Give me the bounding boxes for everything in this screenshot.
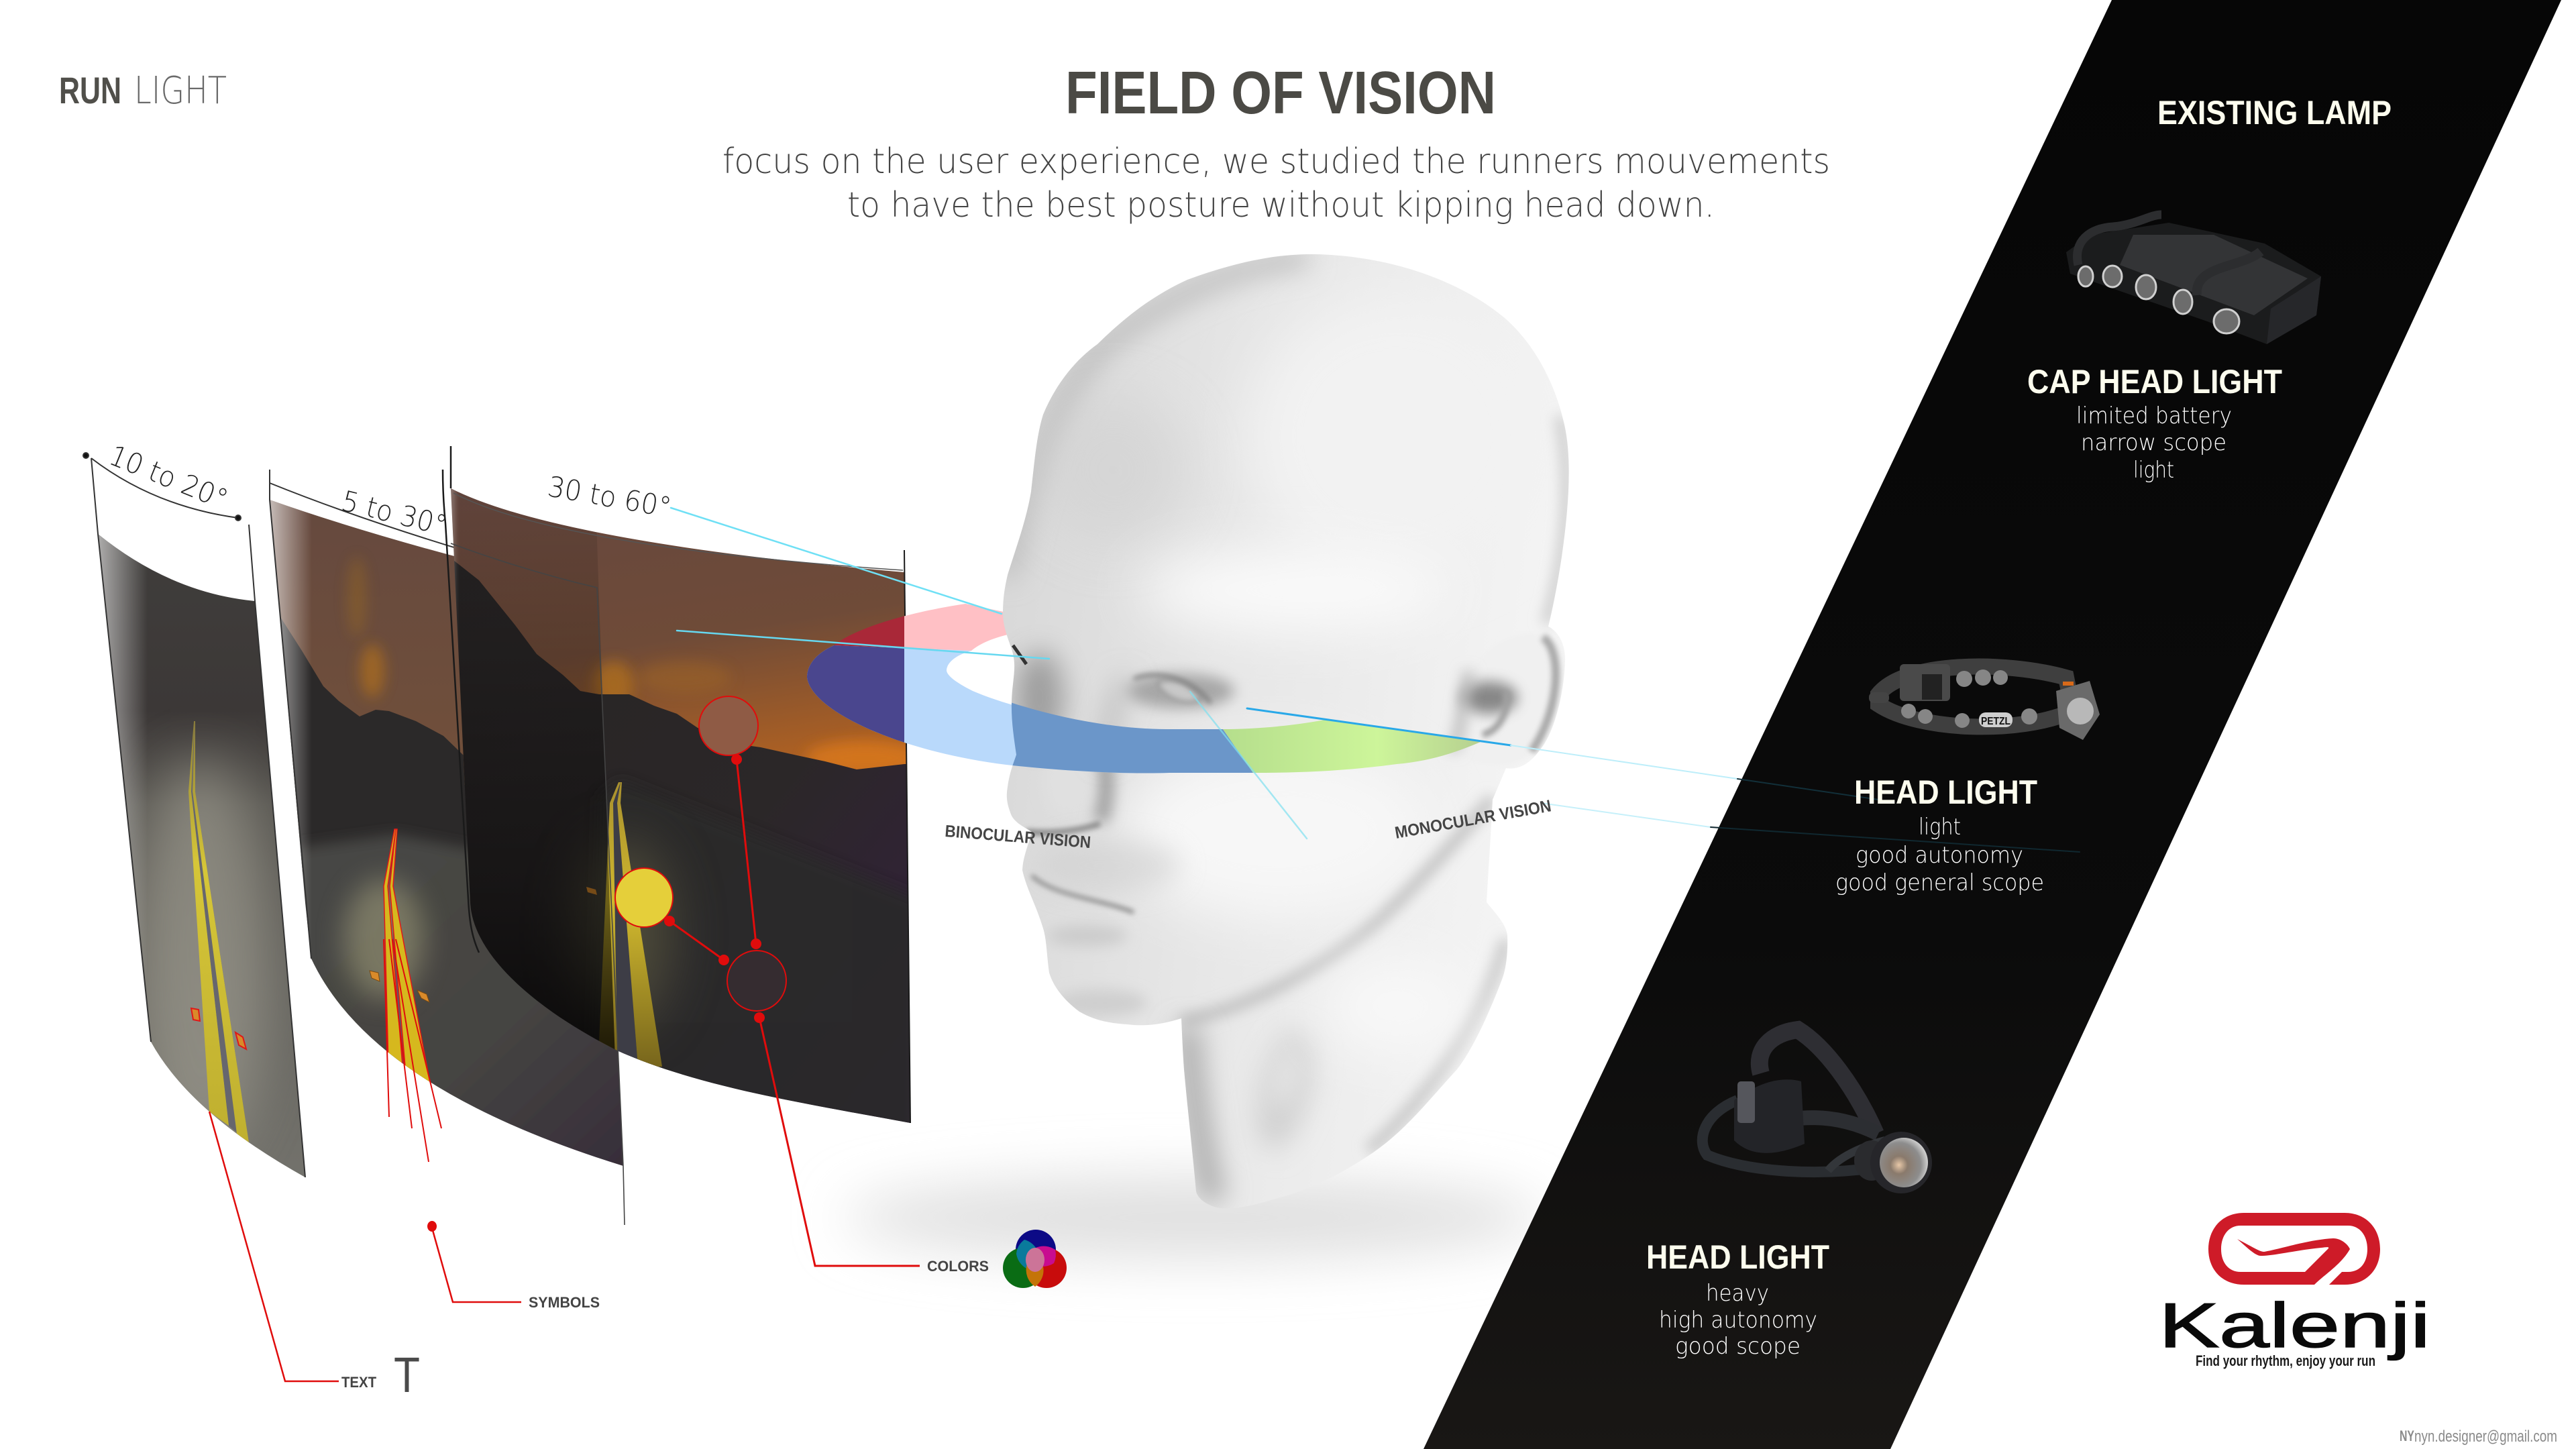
icon: petzl head light	[1869, 664, 2100, 740]
facial shading: eye sockets, nose, mouth	[1013, 645, 1234, 1016]
panel 3: 30 to 60 degrees	[443, 446, 926, 1225]
designer contact: NY	[2400, 1428, 2414, 1444]
colour annotation circles and connectors	[615, 696, 920, 1266]
product: head light, medium: light	[1919, 814, 1961, 841]
subtitle: to have the best posture without kipping head down.	[847, 185, 1715, 225]
panel 3 frame	[443, 446, 910, 1225]
symbols callout: SYMBOLS	[529, 1294, 600, 1311]
subtitle: focus on the user experience, we studied the runners mouvements	[722, 142, 1830, 182]
icon: kalenji red emblem	[2208, 1213, 2380, 1285]
vision ring: binocular front segment	[807, 645, 1253, 773]
product: cap head light: CAP HEAD LIGHT	[2027, 363, 2282, 400]
Kalenji logo: Kalenji	[2159, 1290, 2430, 1360]
angle label: 10 to 20: 10 to 20°	[105, 439, 233, 516]
overlap with panel 2	[453, 518, 614, 1049]
jaw and neck shading	[1181, 798, 1506, 1201]
colors callout	[927, 1230, 1067, 1288]
Kalenji logo	[2159, 1213, 2430, 1369]
product: cap head light: narrow scope	[2081, 429, 2226, 456]
angle label: 30 to 60: 30 to 60°	[545, 470, 674, 524]
lamp LEDs	[2078, 266, 2239, 333]
product: head light, heavy: high autonomy	[1659, 1307, 1817, 1334]
product: head light, heavy: HEAD LIGHT	[1646, 1238, 1829, 1276]
product: head light, medium: good autonomy	[1856, 842, 2023, 869]
Kalenji logo: Find your rhythm, enjoy your run	[2196, 1352, 2375, 1369]
black diagonal band: existing lamps	[1424, 0, 2561, 1449]
icon: black diamond head light	[1703, 1030, 1932, 1193]
product: head light, heavy	[1646, 1238, 1829, 1360]
vision rays	[671, 508, 2080, 852]
product: cap head light: limited battery	[2076, 402, 2232, 429]
product: head light, medium	[1835, 773, 2044, 896]
product: head light, heavy: good scope	[1675, 1333, 1801, 1360]
heading: existing lamp: EXISTING LAMP	[2157, 94, 2392, 131]
symbols callout	[427, 1221, 600, 1311]
icon: cap head light	[2066, 215, 2321, 344]
reflectors, panel 1	[191, 1008, 246, 1049]
head	[1003, 254, 1569, 1209]
colors callout: COLORS	[927, 1258, 989, 1275]
symbol leader lines	[384, 939, 441, 1162]
head floor shadow	[845, 1176, 1543, 1259]
product: head light, medium: good general scope	[1835, 869, 2044, 896]
text callout: TEXT	[341, 1374, 377, 1391]
brand wordmark: RUN LIGHT: LIGHT	[134, 69, 227, 113]
panel 1 frame	[83, 453, 305, 1177]
angle label: 5 to 30: 5 to 30°	[338, 484, 450, 542]
brand wordmark: RUN LIGHT: RUN	[59, 69, 121, 111]
text callout	[209, 1112, 420, 1403]
text callout: T	[394, 1347, 420, 1403]
product: cap head light	[2027, 363, 2282, 484]
icon: rgb colour circles	[1003, 1230, 1067, 1288]
ear	[1452, 633, 1562, 766]
vision ring: monocular segment	[1223, 719, 1481, 773]
title: FIELD OF VISION	[1065, 60, 1496, 127]
reflectors, panel 2	[370, 971, 429, 1002]
vision ring: back segment behind head	[834, 604, 1017, 651]
brand wordmark: RUN LIGHT	[59, 69, 227, 113]
subtitle	[722, 142, 1830, 225]
panel 1: 10 to 20 degrees	[80, 453, 322, 1194]
label: monocular vision: MONOCULAR VISION	[1393, 796, 1552, 843]
icon: petzl head light: PETZL	[1981, 716, 2010, 727]
product: cap head light: light	[2133, 457, 2174, 484]
product: head light, medium: HEAD LIGHT	[1854, 773, 2037, 811]
panel 2 frame	[270, 470, 596, 959]
product: head light, heavy: heavy	[1706, 1280, 1769, 1307]
label: binocular vision: BINOCULAR VISION	[945, 822, 1091, 852]
panel 2: 5 to 30 degrees	[262, 470, 637, 1181]
